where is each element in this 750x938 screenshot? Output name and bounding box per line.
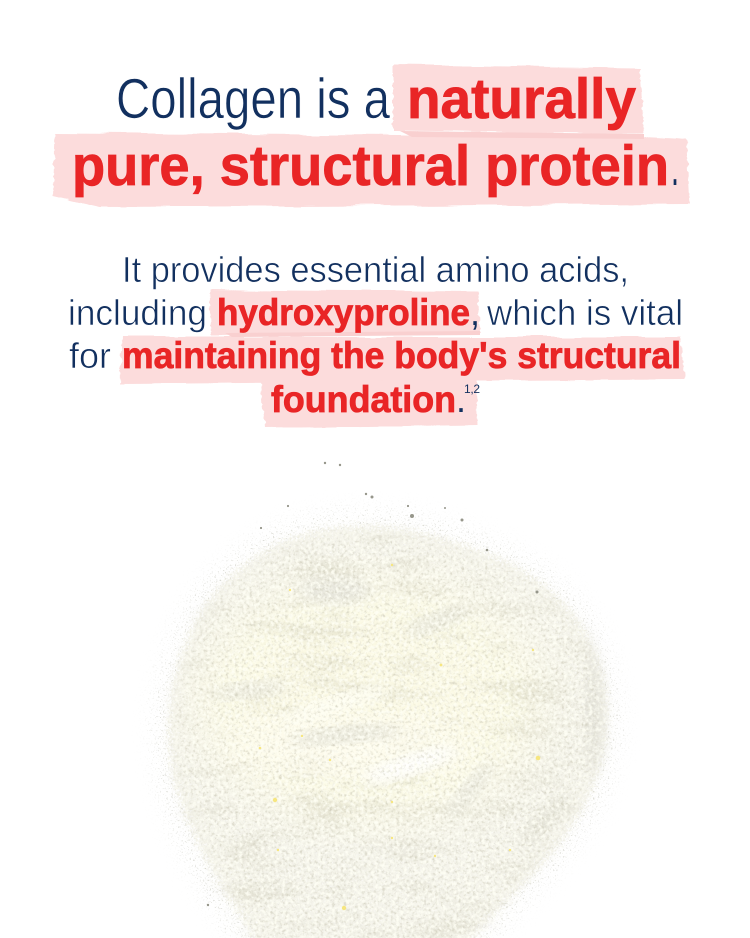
title: Collagen is a [116, 67, 390, 131]
loose grains [207, 462, 539, 906]
title: naturally [407, 67, 636, 131]
body text: hydroxyproline [217, 292, 470, 333]
title [72, 67, 679, 198]
body text: 1,2 [464, 382, 480, 396]
highlight: paragraph brush strokes [120, 290, 685, 428]
image: collagen powder pile [120, 462, 660, 938]
yellow specks [259, 564, 540, 910]
body text [68, 249, 683, 420]
body text: for [69, 335, 111, 376]
highlight: heading brush strokes [53, 65, 690, 207]
title: . [671, 135, 679, 197]
body text: maintaining the body's structural [122, 335, 681, 376]
body text: It provides essential amino acids, [122, 249, 629, 290]
body text: foundation [271, 379, 456, 420]
body text: including [68, 292, 207, 333]
body text: . [456, 379, 466, 420]
body text: , [470, 292, 480, 333]
title: pure, structural protein [72, 134, 669, 198]
body text: which is vital [486, 292, 683, 333]
